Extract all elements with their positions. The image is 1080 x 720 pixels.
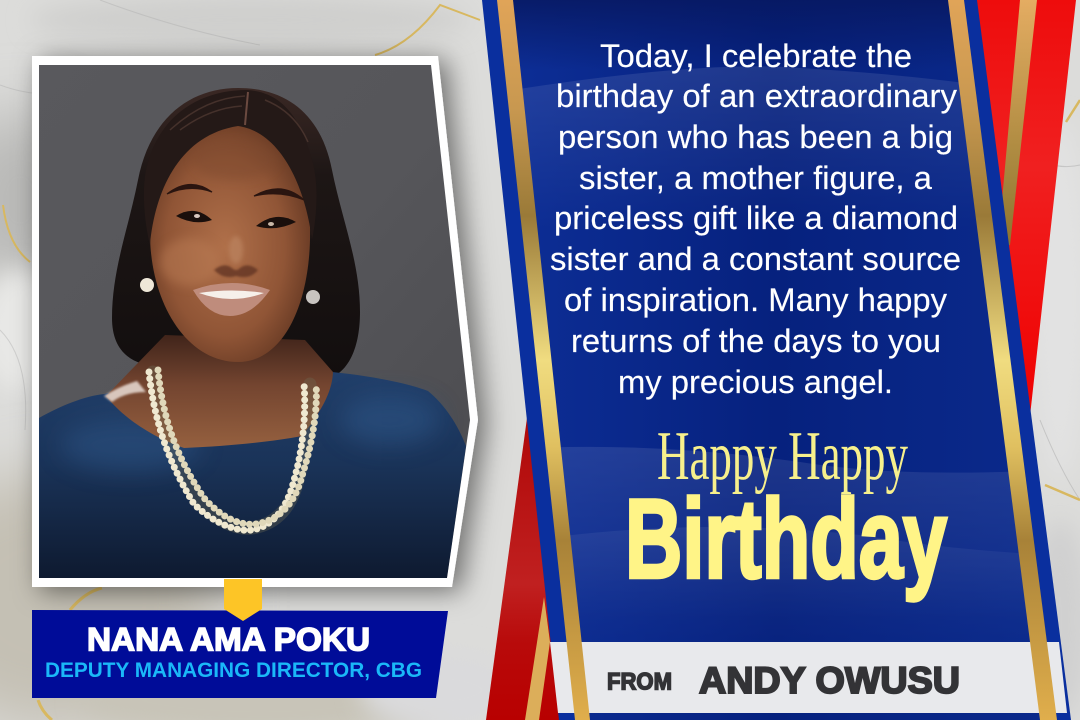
red ribbon: upper right [975,0,1076,416]
hair back [112,88,360,380]
birthday message: birthday of an extraordinary [556,77,958,114]
face [150,122,310,362]
smile [193,283,270,316]
birthday message: sister, a mother figure, a [579,159,933,196]
birthday message: of inspiration. Many happy [564,281,948,318]
from label: FROM [607,668,672,696]
neck and chest [106,335,333,448]
nose [214,265,258,277]
inner gradient area [505,0,1049,720]
waves and top shading [513,0,1025,602]
birthday message: my precious angel. [618,363,893,400]
gold strip on upper red ribbon [998,0,1037,245]
yellow tag [224,579,262,621]
gold strip on lower red ribbon [525,597,550,720]
blue panel [482,0,1071,720]
birthday message [550,37,961,400]
name: NANA AMA POKU [87,621,370,657]
name banner [32,610,448,698]
birthday message: priceless gift like a diamond [554,199,958,236]
heading: Happy Happy: Happy Happy [657,418,908,495]
hair front [144,90,316,245]
eyebrows [167,184,304,200]
birthday message: Today, I celebrate the [600,37,912,74]
dress [39,372,466,578]
earrings [140,278,154,292]
heading: Birthday: Birthday [625,476,947,602]
pearl necklace [149,370,316,530]
birthday message: returns of the days to you [571,322,941,359]
portrait photograph illustration [39,65,479,580]
gold stripe: left [497,0,590,720]
gold stripe: right [948,0,1057,720]
eyes [176,211,212,222]
sender name: ANDY OWUSU [699,660,960,701]
white name strip [550,642,1067,713]
red ribbon: lower left [486,418,562,720]
white frame [32,56,478,587]
birthday message: person who has been a big [558,118,953,155]
job title: DEPUTY MANAGING DIRECTOR, CBG [45,659,422,682]
birthday message: sister and a constant source [550,240,961,277]
photo frame [32,56,479,587]
